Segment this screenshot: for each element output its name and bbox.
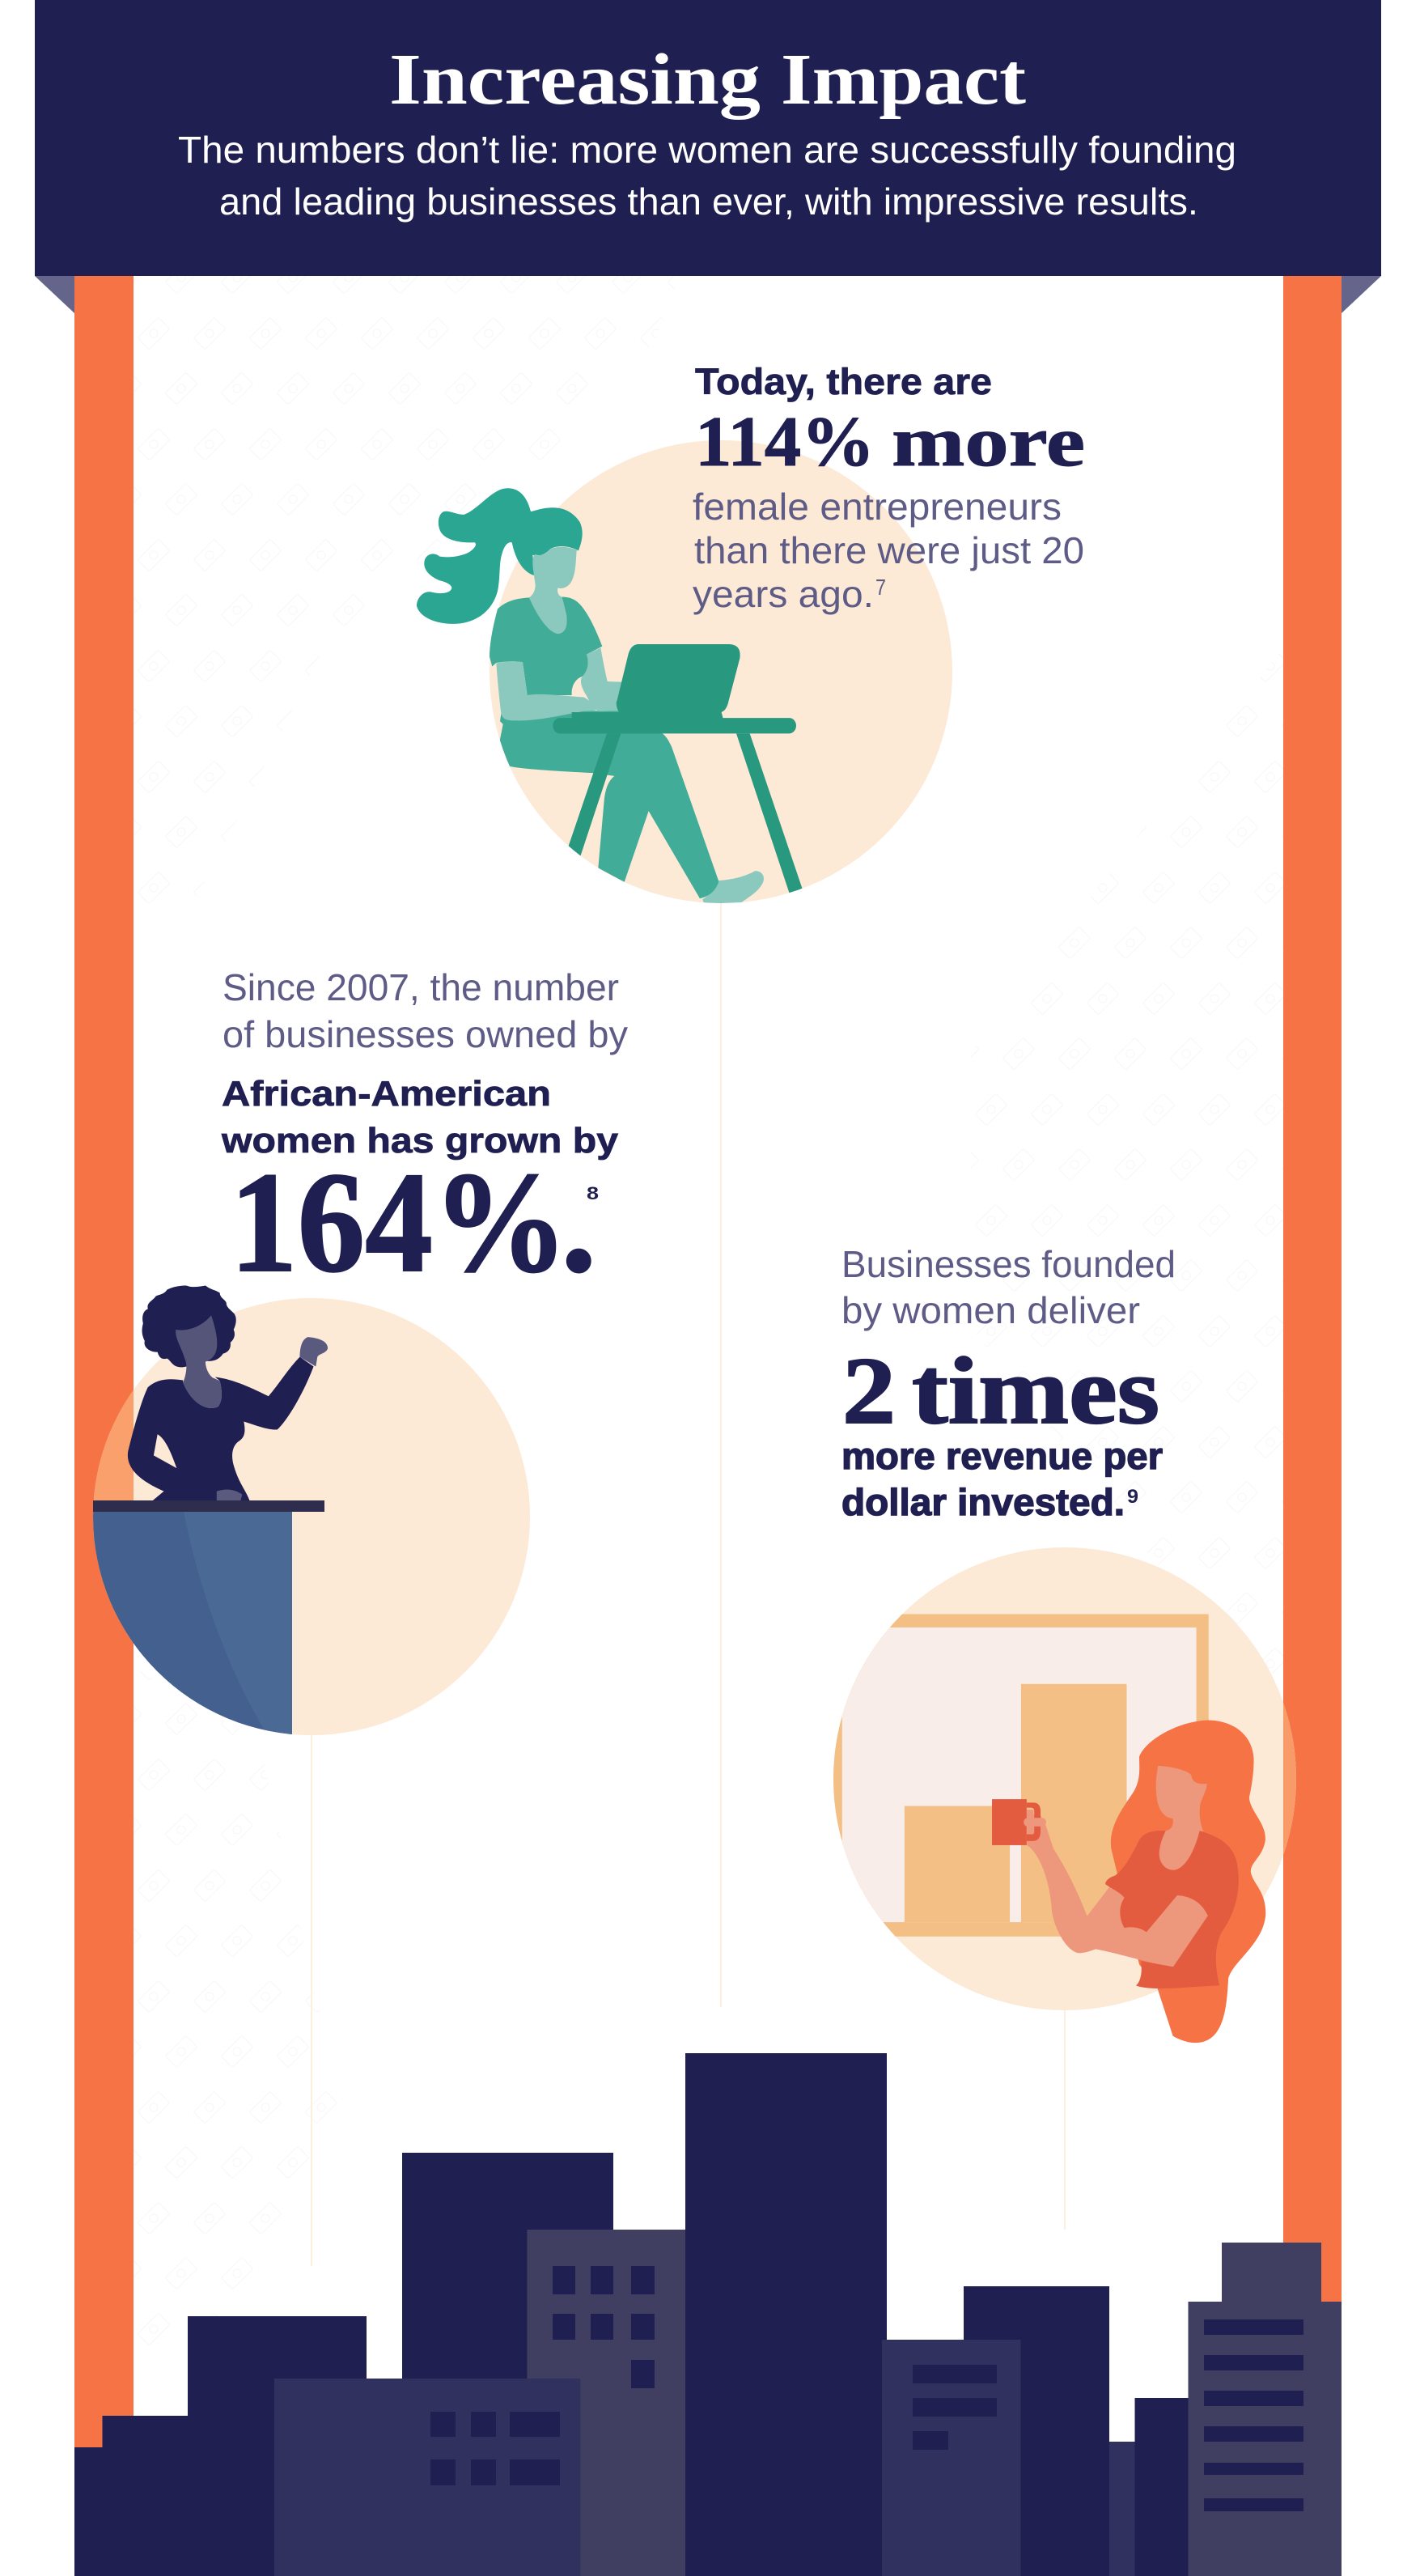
subtitle: and leading businesses than ever, with impressive results. <box>219 180 1198 223</box>
near arm <box>496 661 600 720</box>
city skyline <box>74 2053 1342 2576</box>
stat text: 2 times: more revenue per <box>841 1435 1163 1477</box>
window with skyline <box>809 1615 1209 1937</box>
subtitle: The numbers don’t lie: more women are successfully founding <box>178 129 1236 171</box>
money pattern: right <box>971 647 1283 1700</box>
podium <box>93 1512 292 1738</box>
mid building right windows <box>913 2365 997 2450</box>
small building <box>1109 2442 1134 2576</box>
grey building windows <box>553 2266 655 2388</box>
connector line 3 <box>1064 2010 1066 2230</box>
woman at laptop <box>499 711 803 904</box>
panel: entrepreneur illustration <box>417 440 952 904</box>
header banner <box>35 0 1381 276</box>
stat text: 164%: 164% <box>230 1142 568 1302</box>
fingers <box>1024 1810 1046 1834</box>
stat text: 164%: . <box>561 1142 597 1302</box>
body <box>128 1357 314 1500</box>
stat text: 164%: African-American <box>222 1074 551 1114</box>
circle backdrop <box>833 1547 1296 2010</box>
title: Increasing <box>389 40 761 120</box>
tallest building <box>685 2053 887 2576</box>
podium top <box>93 1500 324 1512</box>
stat text: 114% more: Today, there are <box>695 361 992 402</box>
face and neck <box>529 547 579 634</box>
far arm <box>581 647 621 711</box>
stat text: 114% more: more <box>892 403 1085 482</box>
mid building right <box>882 2340 1021 2576</box>
hair <box>1111 1720 1265 2043</box>
money pattern: top left <box>134 276 680 931</box>
circle over orange bar <box>93 1390 134 1538</box>
circle backdrop <box>93 1298 530 1735</box>
stat text: 164%: Since 2007, the number <box>223 966 619 1008</box>
grey building centre <box>528 2230 685 2576</box>
raised fist <box>300 1337 328 1366</box>
mid building left windows <box>430 2412 560 2485</box>
mug <box>992 1799 1041 1845</box>
connector line 1 <box>720 903 722 2007</box>
stat text: 114% more: 114% <box>695 403 875 482</box>
hair <box>417 488 583 624</box>
stat text: 2 times <box>841 1243 1176 1523</box>
stat text: 2 times: Businesses founded <box>841 1243 1176 1285</box>
connector line 2 <box>311 1735 312 2266</box>
stat text: 2 times: 2 <box>842 1338 896 1444</box>
face and neck <box>1156 1766 1207 1870</box>
stat text: 164% <box>221 966 628 1302</box>
stat text: 114% more: years ago. <box>693 573 874 615</box>
stat text: 114% more <box>693 361 1085 615</box>
table leg front <box>569 733 621 856</box>
hair <box>142 1285 236 1367</box>
table top <box>553 718 796 733</box>
table legs <box>569 733 803 893</box>
stat text: 114% more: 7 <box>875 575 886 600</box>
shirt <box>1105 1831 1239 1988</box>
left orange bar <box>74 276 134 2576</box>
panel: coffee illustration <box>833 1547 1296 2043</box>
stat text: 2 times: 9 <box>1127 1486 1138 1508</box>
foot <box>702 871 764 904</box>
laptop <box>572 644 740 719</box>
dark buildings <box>74 2153 1109 2576</box>
hand on hip <box>217 1490 242 1500</box>
money pattern: bottom left <box>134 1667 340 2363</box>
grey tower <box>1188 2243 1342 2576</box>
shirt <box>490 597 602 695</box>
stat text: 164%: women has grown by <box>221 1121 619 1161</box>
stat text: 114% more: female entrepreneurs <box>693 486 1062 528</box>
circle backdrop <box>490 440 952 903</box>
circle over orange bar <box>1283 1703 1296 1855</box>
face and neck <box>176 1315 222 1408</box>
arm <box>1027 1814 1208 1967</box>
title <box>389 40 1026 120</box>
stat text: 2 times: dollar invested. <box>841 1481 1125 1523</box>
stat text: 2 times: times <box>912 1338 1159 1444</box>
stat text: 2 times: by women deliver <box>841 1289 1140 1331</box>
dark narrow building <box>1134 2398 1188 2576</box>
mid building left <box>274 2379 581 2576</box>
subtitle <box>178 129 1236 223</box>
stat text: 164%: 8 <box>587 1183 599 1203</box>
right orange bar <box>1283 276 1342 2576</box>
title: Impact <box>781 40 1026 120</box>
stat text: 114% more: than there were just 20 <box>694 529 1084 571</box>
banner fold left <box>35 276 74 313</box>
stat text: 164%: of businesses owned by <box>223 1013 628 1055</box>
grey tower windows <box>1204 2319 1303 2511</box>
panel: podium illustration <box>74 1285 530 1738</box>
banner fold right <box>1342 276 1381 313</box>
legs <box>499 711 718 898</box>
